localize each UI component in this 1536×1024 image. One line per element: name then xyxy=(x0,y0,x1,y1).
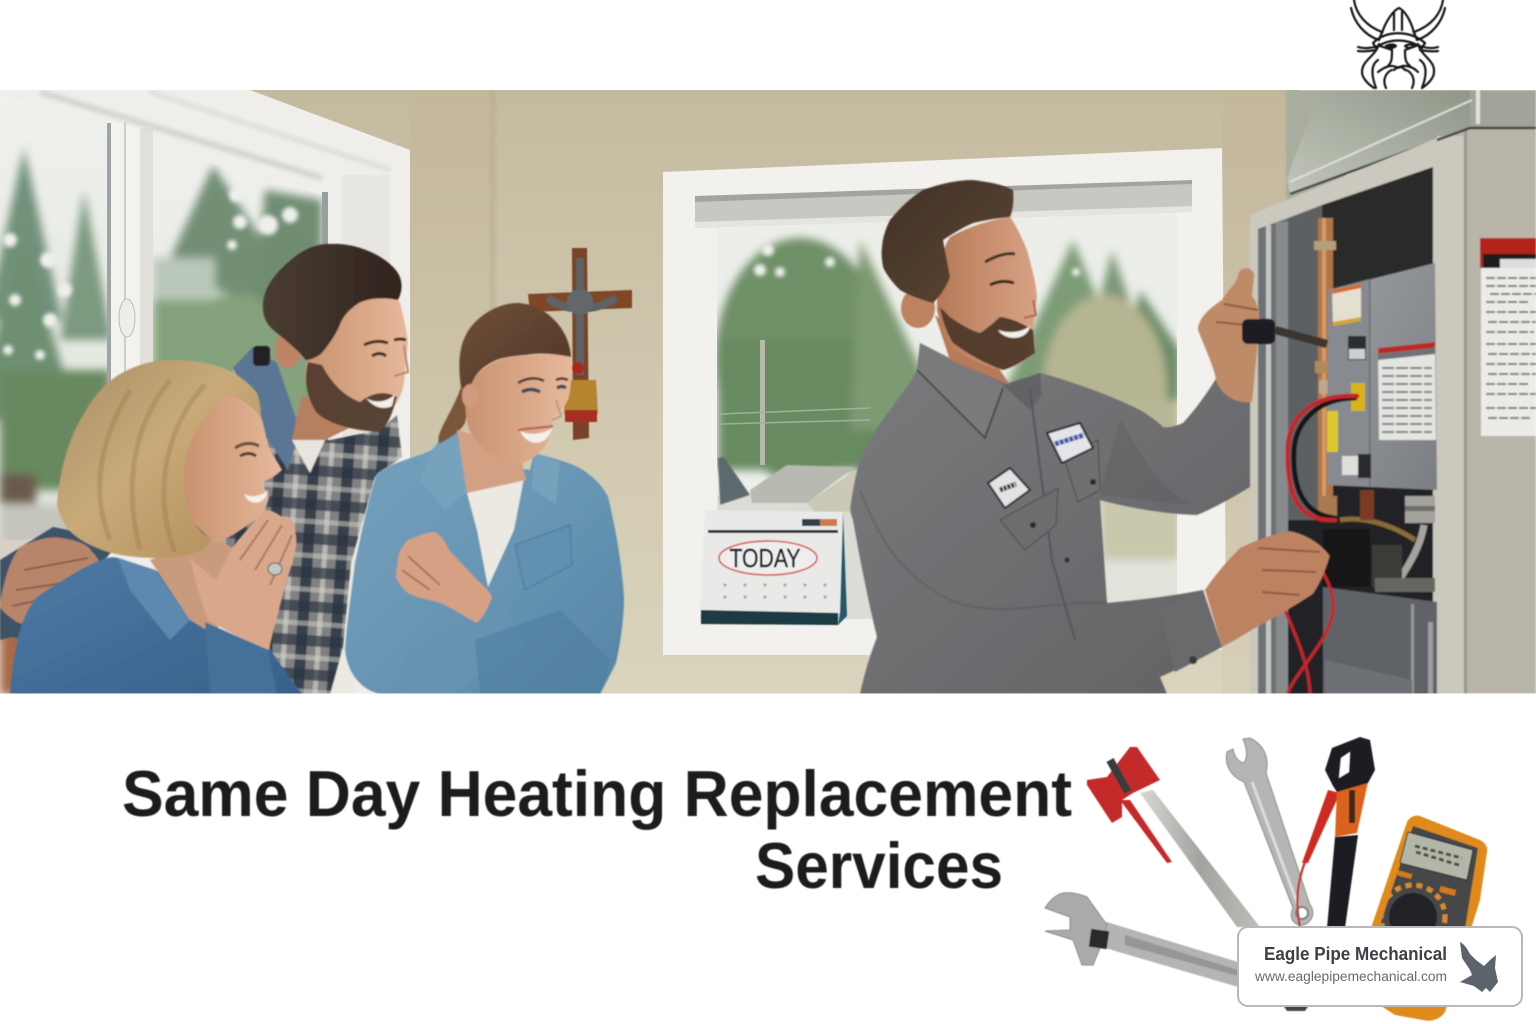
left window pane with trees xyxy=(0,147,107,540)
brand card xyxy=(1238,927,1522,1006)
neck xyxy=(457,430,526,493)
crucifix on wall xyxy=(528,248,632,440)
tool: red multimeter probe xyxy=(1297,790,1340,928)
calendar word: TODAY xyxy=(730,543,800,573)
title xyxy=(122,757,1072,902)
grey control box xyxy=(1327,263,1437,490)
calendar: today xyxy=(700,510,847,625)
lower burner components xyxy=(1405,496,1435,523)
ear xyxy=(275,332,301,368)
person: man in plaid shirt xyxy=(195,242,410,694)
warning label xyxy=(1480,238,1536,436)
wall xyxy=(250,90,1300,694)
window latch xyxy=(119,299,135,337)
control box labels xyxy=(1332,284,1361,326)
neck xyxy=(935,315,1010,385)
house outside xyxy=(717,457,877,625)
brand website: www.eaglepipemechanical.com xyxy=(1254,969,1447,984)
hair xyxy=(263,244,402,360)
tool: red pipe cutter xyxy=(1087,747,1260,927)
person: young woman in denim shirt xyxy=(345,303,624,694)
person: older woman with blonde hair xyxy=(10,360,302,694)
brand name: Eagle Pipe Mechanical xyxy=(1264,944,1447,964)
ear xyxy=(901,288,935,328)
hair xyxy=(57,360,261,558)
white t-shirt xyxy=(467,478,524,587)
photo: technician and family xyxy=(0,90,1536,695)
face xyxy=(937,217,1037,370)
hair xyxy=(459,303,571,392)
title line 2: Services xyxy=(755,829,1003,902)
name patch: right xyxy=(1047,423,1093,463)
left window xyxy=(0,90,410,695)
face xyxy=(184,393,282,543)
hands pressed together xyxy=(190,510,296,650)
window glass with trees xyxy=(710,205,1185,625)
front frame xyxy=(1250,138,1437,694)
beard xyxy=(306,362,397,432)
person: technician in grey work shirt xyxy=(850,180,1330,694)
ponytail xyxy=(438,387,470,444)
tools illustration xyxy=(1045,737,1487,1021)
logo: viking head xyxy=(1351,0,1445,88)
right window pane with trees xyxy=(153,163,322,420)
face xyxy=(465,354,571,463)
tool: digital multimeter xyxy=(1372,816,1487,1021)
person: man's arm around mother xyxy=(0,527,120,640)
tool: adjustable wrench xyxy=(1045,893,1238,987)
beard xyxy=(940,307,1035,370)
wall behind duct xyxy=(1286,90,1346,200)
plaid shirt xyxy=(195,368,402,694)
cabinet side panel xyxy=(1437,128,1536,694)
red and black wires xyxy=(1285,396,1357,692)
sheet metal duct xyxy=(1287,90,1472,194)
furnace cabinet xyxy=(1250,90,1536,694)
lower hand xyxy=(1205,531,1330,647)
face xyxy=(305,297,408,431)
work shirt xyxy=(850,343,1250,694)
center window xyxy=(663,148,1226,655)
title line 1: Same Day Heating Replacement xyxy=(122,757,1072,830)
dark interior xyxy=(1258,167,1433,694)
neck xyxy=(150,538,232,630)
lower panel xyxy=(1323,587,1437,694)
tool: open-end wrench xyxy=(1226,738,1313,925)
name patch: left xyxy=(988,468,1030,508)
neck xyxy=(292,395,355,440)
copper pipe xyxy=(1314,218,1339,520)
shirt cuff xyxy=(1160,590,1222,672)
woman's hand on chest xyxy=(396,532,492,623)
upper hand with screwdriver xyxy=(1198,268,1260,402)
icon: eagle xyxy=(1460,942,1498,992)
hair xyxy=(882,180,1013,303)
denim jacket xyxy=(10,557,302,694)
tool: clamp meter xyxy=(1325,737,1375,928)
